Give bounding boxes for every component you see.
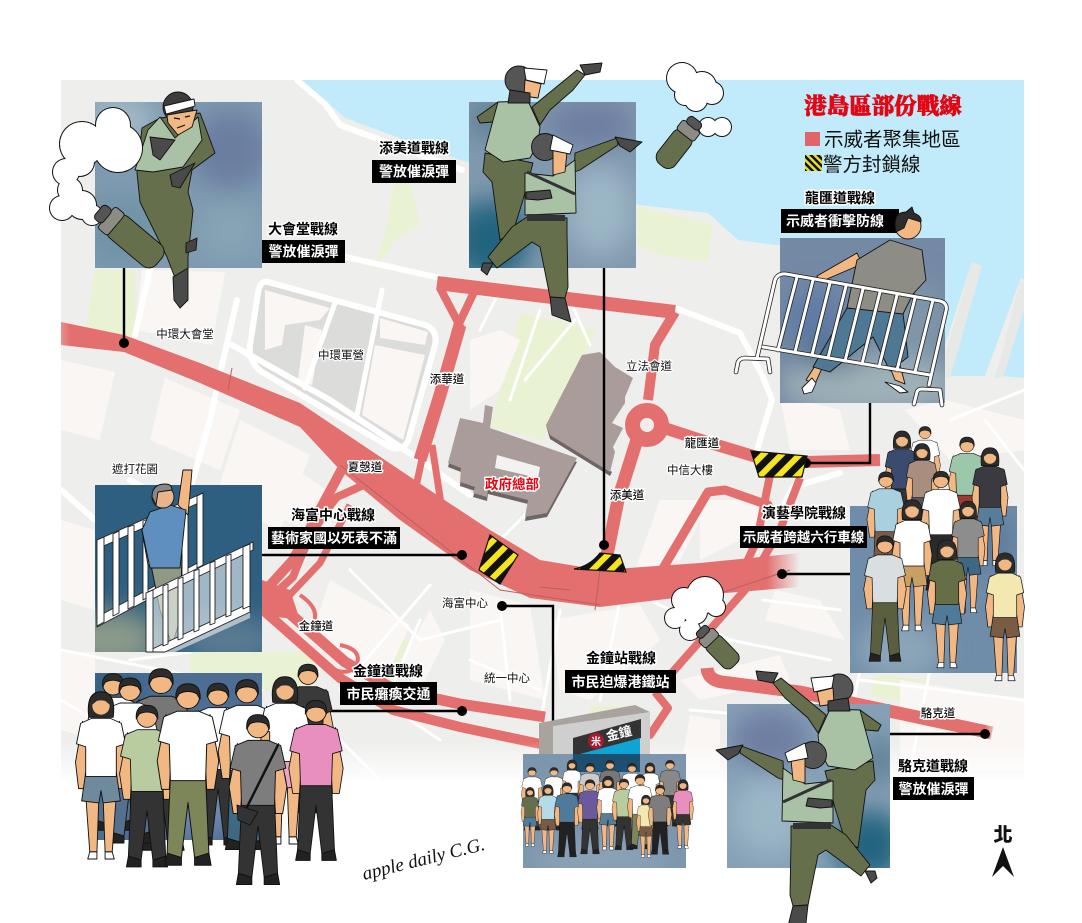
white road network (61, 80, 840, 555)
callout: Lockhart Road front: 警放催淚彈 (898, 781, 968, 797)
callout: Tim Mei Avenue front: 添美道戰線 (379, 140, 449, 156)
military barracks block (250, 282, 436, 449)
front fence (146, 542, 253, 652)
callout lines (119, 262, 990, 739)
running protesters (864, 426, 1024, 681)
panel: Lung Wui Road protester with barrier (736, 207, 960, 415)
place names: 中信大樓 (667, 463, 713, 477)
place names: 遮打花園 (112, 462, 158, 476)
callout: Queensway front (340, 663, 437, 705)
callout: Tim Mei Avenue front: 警放催淚彈 (379, 164, 449, 180)
protester (802, 207, 926, 394)
place names: 中環大會堂 (156, 327, 214, 341)
callout: City Hall front: 警放催淚彈 (268, 244, 338, 260)
callout: Admiralty Centre front: 藝術家國以死表不滿 (271, 530, 397, 546)
legend: 示威者聚集地區 (824, 129, 961, 151)
callout: Admiralty Centre front: 海富中心戰線 (291, 507, 375, 523)
callout: Lockhart Road front (893, 758, 974, 800)
place names: 添美道 (610, 488, 645, 502)
callout: Queensway front: 市民癱瘓交通 (346, 686, 430, 702)
place names: 駱克道 (921, 706, 956, 720)
label: government headquarters: 政府總部 (485, 476, 539, 492)
callout: Lockhart Road front: 駱克道戰線 (898, 758, 968, 774)
north arrow: 北 (993, 824, 1013, 846)
base land (61, 80, 1024, 780)
panel: Lockhart Road soldiers (716, 671, 905, 923)
legend (805, 129, 961, 176)
tear gas canister (90, 200, 168, 272)
place names: 龍匯道 (685, 436, 720, 450)
soldiers (716, 671, 881, 923)
MTR entrance: 金鐘 (604, 723, 633, 744)
back fence (97, 493, 203, 627)
callout: City Hall front: 大會堂戰線 (268, 221, 338, 237)
legend: 警方封鎖線 (823, 154, 921, 176)
smoke cloud (49, 107, 143, 226)
title: 港島區部份戰線 (804, 93, 962, 119)
police blockade: Tim Mei Avenue (574, 553, 626, 572)
government headquarters building (448, 405, 577, 517)
panel: Admiralty Centre rail protester (95, 470, 262, 652)
place names: 海富中心 (442, 596, 488, 610)
callout: Academy for Performing Arts front: 演藝學院戰線 (762, 505, 846, 521)
place names: 統一中心 (484, 671, 530, 685)
smoke cloud with canister: middle (664, 576, 742, 672)
building blocks (61, 270, 1024, 770)
piers (938, 262, 1024, 378)
police blockade: Harcourt Road (479, 535, 518, 584)
soldier (135, 92, 215, 308)
callout: Admiralty station front (565, 650, 676, 693)
legislative council building (546, 425, 612, 476)
place names: 添華道 (430, 372, 465, 386)
MTR entrance (539, 705, 650, 790)
police blockade: Lung Wui Road (751, 451, 807, 477)
callout: Admiralty station front: 金鐘站戰線 (586, 650, 656, 666)
MTR entrance: 米 (591, 735, 601, 748)
place names (112, 327, 956, 720)
panel: Admiralty station (521, 705, 694, 875)
place names: 立法會道 (626, 359, 672, 373)
place names: 中環軍營 (318, 349, 364, 362)
place names: 夏愨道 (348, 460, 383, 474)
callout: Academy for Performing Arts front: 示威者跨越六行車線 (743, 529, 865, 545)
sea (297, 80, 1024, 378)
metal barrier (736, 274, 946, 405)
callout: City Hall front (262, 221, 345, 263)
standing group (76, 664, 343, 885)
callout: Academy for Performing Arts front (740, 505, 867, 548)
government headquarters building shadow (448, 422, 577, 521)
callout: Lung Wui Road front (781, 190, 899, 233)
panel: Tim Mei Avenue soldiers (450, 63, 642, 322)
callout: Admiralty station front: 市民迫爆港鐵站 (572, 674, 670, 690)
panel: City Hall soldier (49, 92, 270, 308)
map (50, 80, 1035, 794)
protester (142, 470, 192, 645)
callout: Admiralty Centre front (268, 507, 400, 549)
fade (61, 742, 1024, 784)
parks (85, 175, 930, 740)
place names: 金鐘道 (299, 619, 334, 633)
callout: Lung Wui Road front: 龍匯道戰線 (805, 190, 875, 206)
panel: Queensway citizens group (76, 664, 343, 885)
signature: apple daily C.G. (360, 834, 487, 885)
soldiers (477, 63, 642, 322)
callout: Queensway front: 金鐘道戰線 (353, 663, 423, 679)
smoke cloud with canister: top centre (653, 62, 732, 172)
callout: Lung Wui Road front: 示威者衝擊防線 (786, 213, 884, 229)
panel: Academy for Performing Arts crowd (850, 426, 1024, 681)
callout: Tim Mei Avenue front (372, 140, 456, 183)
red protest roads (61, 283, 992, 745)
tiny crowd (521, 760, 694, 857)
north arrow (992, 824, 1014, 877)
